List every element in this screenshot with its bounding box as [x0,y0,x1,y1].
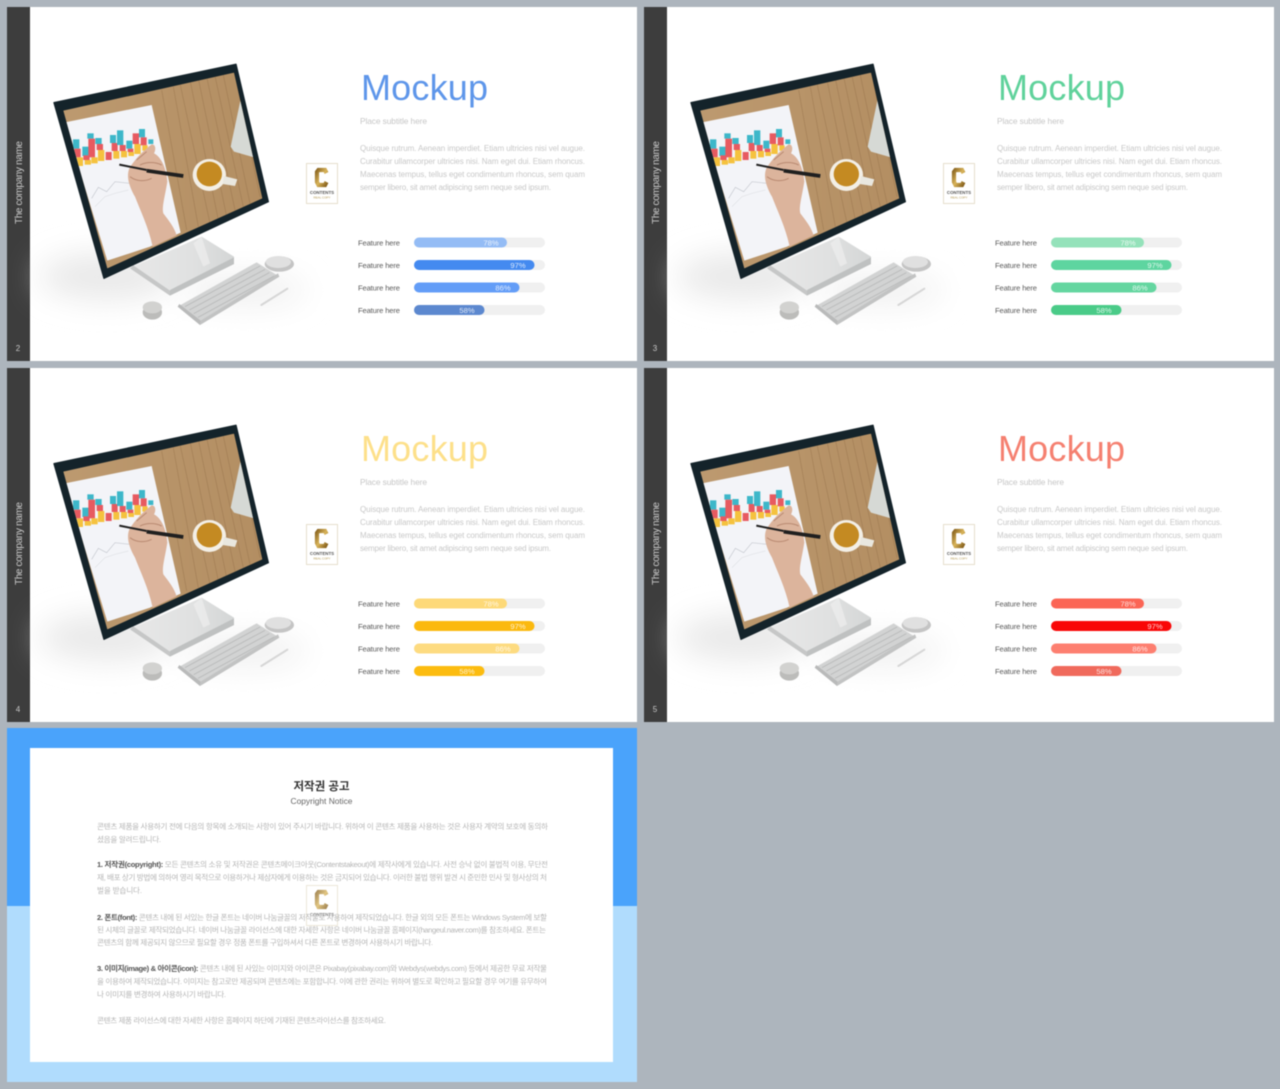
panel: green mockup slide [644,7,1274,361]
bar chart: features: Feature here [995,622,1037,631]
body text: Quisque rutrum. Aenean imperdiet. Etiam ultricies nisi vel augue. [360,505,585,514]
bar chart: features: 86% [1132,644,1148,654]
title: Mockup [361,67,488,108]
logo [306,164,338,204]
bar chart: features: 97% [1147,261,1163,270]
bar chart: features: Feature here [358,600,400,608]
body text: Curabitur ullamcorper ultricies nisi. Nam eget dui. Etiam rhoncus. [360,157,585,166]
title: Mockup [361,428,488,469]
body text: semper libero, sit amet adipiscing sem neque sed ipsum. [360,544,551,553]
sidebar [7,7,30,361]
text block: font: 된 시체의 글꼴로 제작되었습니다. 네이버 나눔글꼴 라이선스에 대한 자세한 사항은 네이버 나눔글꼴 홈페이지(hangeul.naver.com)를 참조하세요. 폰트는 [97,924,546,934]
bar chart: features: 86% [1132,284,1148,292]
bar chart: features: 78% [483,600,499,608]
text block: copyright [97,859,548,895]
logo: CONTENTS [310,190,334,195]
body text: Curabitur ullamcorper ultricies nisi. Nam eget dui. Etiam rhoncus. [997,157,1222,166]
text block: font [97,912,547,947]
body text [360,505,585,553]
bar chart: features: 58% [459,667,475,676]
text block: images and icons: 을 이용하여 제작되었습니다. 이미지는 참고로만 제공되며 콘텐츠에는 포함합니다. 이에 관한 권리는 위하여 별도로 확인하고 필요할 경우 여기를 유무하여 [97,976,547,986]
bar chart: features: 78% [483,238,499,248]
text block: license note: 콘텐츠 제품 라이선스에 대한 자세한 사항은 홈페이지 하단에 기재된 콘텐츠라이선스를 참조하세요. [97,1015,386,1025]
logo: CONTENTS [947,190,971,195]
body text: Quisque rutrum. Aenean imperdiet. Etiam ultricies nisi vel augue. [360,144,585,153]
bar chart: features: 97% [510,261,526,270]
bar chart: features: Feature here [358,622,400,631]
subheading: Copyright Notice [291,796,353,806]
panel: blue mockup slide [7,7,637,361]
logo: REAL COPY [313,196,331,200]
sidebar [7,368,30,722]
sidebar: 5 [653,705,658,714]
bar chart: features: 58% [1096,667,1112,676]
sidebar [644,7,667,361]
body text: Quisque rutrum. Aenean imperdiet. Etiam ultricies nisi vel augue. [997,144,1222,153]
icon: desktop computer mockup [40,425,307,686]
bar chart: features: 58% [1096,306,1112,315]
text block: copyright: 1. 저작권(copyright): 모든 콘텐츠의 소유 및 저작권은 콘텐츠메이크아웃(Contentstakeout)에 제작사에게 있습니다. 사전 승낙 없이 불법적 이용, 무단전 [97,859,548,869]
sidebar: 4 [16,705,21,714]
text block: copyright: 벌을 받습니다. [97,885,142,895]
body text: Maecenas tempus, tellus eget condimentum rhoncus, sem quam [997,170,1222,179]
sidebar: The company name [14,141,25,224]
body text: Curabitur ullamcorper ultricies nisi. Nam eget dui. Etiam rhoncus. [997,518,1222,527]
bar chart: features: Feature here [358,667,400,676]
body text: Quisque rutrum. Aenean imperdiet. Etiam ultricies nisi vel augue. [997,505,1222,514]
bar chart: features: 86% [495,644,511,654]
bar chart: features: Feature here [995,644,1037,654]
body text [997,505,1222,553]
logo: CONTENTS [947,551,971,556]
bar chart: features: 86% [495,284,511,292]
title: Mockup [998,428,1125,469]
text block: font: 2. 폰트(font): 콘텐츠 내에 된 서있는 한글 폰트는 네이버 나눔글꼴의 저작물로 사용하여 제작되었습니다. 한글 외의 모든 폰트는 Windows System에 보할 [97,912,547,922]
sidebar: 2 [16,344,21,353]
bar chart: features: Feature here [358,306,400,315]
icon: desktop computer mockup [677,64,944,325]
body text: semper libero, sit amet adipiscing sem neque sed ipsum. [997,544,1188,553]
logo: REAL COPY [950,196,968,200]
sidebar: 3 [653,344,658,353]
icon: desktop computer mockup [40,64,307,325]
sidebar: The company name [14,502,25,585]
icon: desktop computer mockup [677,425,944,686]
subtitle: Place subtitle here [997,116,1064,126]
body text: Maecenas tempus, tellus eget condimentum rhoncus, sem quam [997,531,1222,540]
bar chart: features: Feature here [995,306,1037,315]
bar chart: features [358,238,545,315]
bar chart: features: 78% [1120,238,1136,248]
body text: Curabitur ullamcorper ultricies nisi. Nam eget dui. Etiam rhoncus. [360,518,585,527]
title: Mockup [998,67,1125,108]
text block: intro: 콘텐츠 제품을 사용하기 전에 다음의 항목에 소개되는 사항이 있어 주시기 바랍니다. 위하여 이 콘텐츠 제품을 사용하는 것은 사용자 계약의 보호에 동의하 [97,821,548,831]
bar chart: features [995,598,1182,676]
panel: copyright notice slide [7,728,637,1082]
logo [944,164,974,204]
logo: CONTENTS [310,551,334,556]
body text: semper libero, sit amet adipiscing sem neque sed ipsum. [997,183,1188,192]
body text [360,144,585,192]
panel: yellow mockup slide [7,368,637,722]
sidebar: The company name [651,502,662,585]
text block: intro: 셨음을 알려드립니다. [97,834,161,844]
text block: copyright: 재, 배포 상기 방법에 의하여 영리 목적으로 이용하거나 제삼자에게 이용하는 것은 금지되어 있습니다. 이러한 불법 행위 발견 시 준민한 민사 및 형사상의 처 [97,872,547,882]
panel: red mockup slide [644,368,1274,722]
logo [306,524,338,564]
bar chart: features: Feature here [358,261,400,270]
bar chart: features [995,238,1182,315]
logo: REAL COPY [950,556,968,560]
text block: images and icons [97,963,547,999]
sidebar: The company name [651,141,662,224]
body text: Maecenas tempus, tellus eget condimentum rhoncus, sem quam [360,170,585,179]
bar chart: features: 97% [510,622,526,631]
body text: Maecenas tempus, tellus eget condimentum rhoncus, sem quam [360,531,585,540]
body text: semper libero, sit amet adipiscing sem neque sed ipsum. [360,183,551,192]
text block: font: 콘텐츠의 함께 제공되지 않으므로 필요할 경우 정품 폰트를 구입하셔서 다른 폰트로 변경하여 사용하시기 바랍니다. [97,937,433,947]
subtitle: Place subtitle here [360,477,427,487]
text block: intro [97,821,548,844]
heading: 저작권 공고 [293,779,350,793]
bar chart: features: 78% [1120,600,1136,608]
subtitle: Place subtitle here [360,116,427,126]
body text [997,144,1222,192]
text block: images and icons: 3. 이미지(image) & 아이콘(icon): 콘텐츠 내에 된 사있는 이미지와 아이콘은 Pixabay(pixabay.com)와 Webdys(webdys.com) 등에서 제공한 무료 저작물 [97,963,547,973]
bar chart: features: Feature here [358,284,400,292]
bar chart: features: Feature here [358,644,400,654]
bar chart: features: Feature here [995,284,1037,292]
bar chart: features: 97% [1147,622,1163,631]
subtitle: Place subtitle here [997,477,1064,487]
bar chart: features: 58% [459,306,475,315]
bar chart: features: Feature here [995,667,1037,676]
text block: images and icons: 나 이미지를 변경하여 사용하시기 바랍니다. [97,989,226,999]
bar chart: features [358,598,545,676]
logo [306,886,338,926]
bar chart: features: Feature here [995,261,1037,270]
logo [944,524,974,564]
logo: CONTENTS [310,912,334,917]
bar chart: features: Feature here [995,238,1037,248]
bar chart: features: Feature here [358,238,400,248]
logo: REAL COPY [313,556,331,560]
bar chart: features: Feature here [995,600,1037,608]
sidebar [644,368,667,722]
